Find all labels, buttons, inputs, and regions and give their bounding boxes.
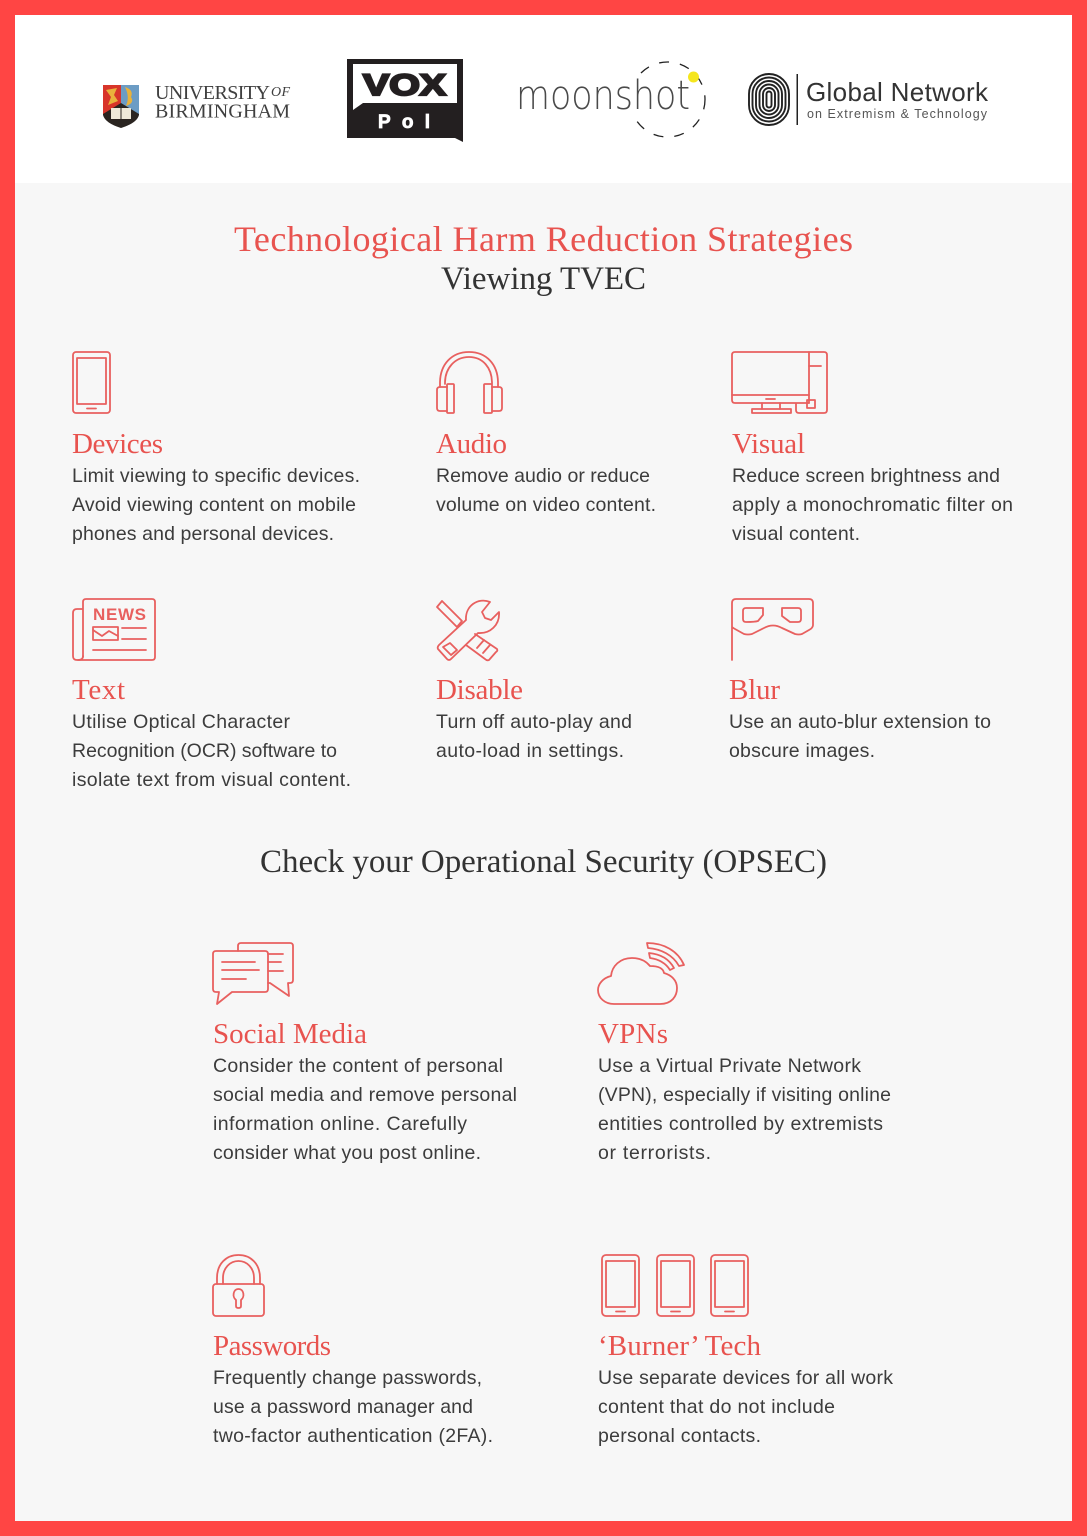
heading: Disable: Disable: [436, 674, 523, 706]
text: Blur description: [729, 711, 991, 762]
panel: Passwords: [213, 1255, 493, 1447]
heading: Devices: Devices: [72, 428, 163, 460]
logo: Global Network on Extremism and Technology: Global Network: [806, 77, 989, 107]
text: Social Media description: Consider the content of personal: [213, 1055, 503, 1077]
text: Text description: isolate text from visual content.: [72, 769, 351, 791]
heading: Passwords: Passwords: [213, 1330, 331, 1362]
panel: Visual: [732, 352, 1013, 545]
text: Text description: Utilise Optical Character: [72, 711, 290, 733]
text: Devices description: Avoid viewing content on mobile: [72, 494, 356, 516]
heading: Check your Operational Security: Check your Operational Security (OPSEC): [260, 844, 827, 880]
icon: newspaper: [73, 599, 155, 660]
logo: University of Birmingham: UNIVERSITY: [155, 82, 270, 104]
logo: moonshot: moonshot: [516, 73, 690, 119]
text: Devices description: Limit viewing to specific devices.: [72, 465, 360, 487]
logo: Global Network on Extremism and Technology: [749, 74, 989, 125]
text: Social Media description: social media and remove personal: [213, 1084, 517, 1106]
text: Audio description: [436, 465, 656, 516]
text: Social Media description: information online. Carefully: [213, 1113, 467, 1135]
panel: Audio: [436, 352, 656, 516]
panel: Social Media: [213, 943, 517, 1164]
heading: Text: Text: [72, 674, 125, 706]
panel: Devices: [72, 352, 360, 545]
logo: University of Birmingham: BIRMINGHAM: [155, 100, 290, 122]
text: Visual description: apply a monochromatic filter on: [732, 494, 1013, 516]
text: Devices description: [72, 465, 360, 545]
heading: VPNs: VPNs: [598, 1018, 668, 1050]
heading: Burner Tech: ‘Burner’ Tech: [598, 1330, 762, 1362]
text: VPNs description: entities controlled by extremists: [598, 1113, 883, 1135]
icon: padlock: [213, 1255, 264, 1316]
panel: Text: [72, 599, 351, 791]
text: Text description: Recognition (OCR) software to: [72, 740, 337, 762]
heading: Blur: Blur: [729, 674, 780, 706]
text: VPNs description: (VPN), especially if visiting online: [598, 1084, 891, 1106]
icon: desktop computer: [732, 352, 827, 413]
text: Burner Tech description: Use separate devices for all work: [598, 1367, 893, 1389]
text: Devices description: phones and personal devices.: [72, 523, 334, 545]
text: VPNs description: or terrorists.: [598, 1142, 711, 1164]
panel: Disable: [436, 601, 632, 762]
logo: VOX-Pol: Pol: [378, 112, 430, 133]
text: Passwords description: use a password manager and: [213, 1396, 473, 1418]
text: Blur description: Use an auto-blur extension to: [729, 711, 991, 733]
heading: Visual: Visual: [732, 428, 805, 460]
text: Blur description: obscure images.: [729, 740, 875, 762]
text: Social Media description: [213, 1055, 517, 1164]
text: VPNs description: Use a Virtual Private Network: [598, 1055, 861, 1077]
text: Visual description: Reduce screen brightness and: [732, 465, 1000, 487]
icon: three phones: [602, 1255, 748, 1316]
heading: Audio: Audio: [436, 428, 507, 460]
title: Technological Harm Reduction Strategies: [234, 219, 853, 259]
text: Visual description: [732, 465, 1013, 545]
icon: newspaper: NEWS: [93, 605, 146, 624]
text: Visual description: visual content.: [732, 523, 860, 545]
logo: University of Birmingham: OF: [271, 85, 290, 100]
text: Passwords description: two-factor authentication (2FA).: [213, 1425, 493, 1447]
text: Passwords description: [213, 1367, 493, 1447]
icon: tablet: [73, 352, 110, 413]
text: Burner Tech description: content that do not include: [598, 1396, 835, 1418]
heading: Social Media: Social Media: [213, 1018, 367, 1050]
subtitle: Viewing TVEC: [441, 261, 646, 297]
icon: headphones: [437, 352, 502, 413]
icon: speech bubbles: [213, 943, 293, 1004]
panel: VPNs: [598, 943, 891, 1164]
icon: wrench and screwdriver: [437, 601, 499, 660]
text: Audio description: Remove audio or reduce: [436, 465, 650, 487]
logo: Global Network on Extremism and Technology: on Extremism & Technology: [807, 107, 988, 121]
text: VPNs description: [598, 1055, 891, 1164]
text: Social Media description: consider what you post online.: [213, 1142, 481, 1164]
text: Passwords description: Frequently change passwords,: [213, 1367, 482, 1389]
text: Burner Tech description: personal contacts.: [598, 1425, 761, 1447]
panel: Burner Tech: [598, 1255, 893, 1447]
text: Disable description: Turn off auto-play and: [436, 711, 632, 733]
logo: VOX-Pol: VOX: [363, 69, 446, 102]
logo: VOX-Pol: [347, 59, 463, 142]
text: Text description: [72, 711, 351, 791]
text: Disable description: auto-load in settings.: [436, 740, 624, 762]
panel: Blur: [729, 599, 991, 762]
text: Audio description: volume on video content.: [436, 494, 656, 516]
text: Disable description: [436, 711, 632, 762]
icon: cloud with signal: [598, 943, 684, 1004]
logo: moonshot: [500, 62, 705, 137]
icon: eye mask: [732, 599, 813, 660]
logo: University of Birmingham: [103, 82, 290, 128]
text: Burner Tech description: [598, 1367, 893, 1447]
